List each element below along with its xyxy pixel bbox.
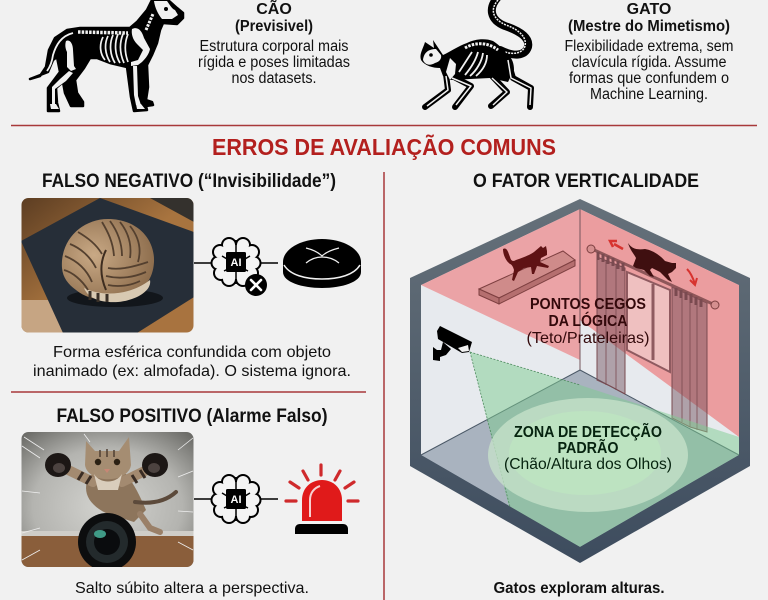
- connector: [194, 262, 278, 264]
- text: cat description: Machine Learning.: [590, 86, 708, 103]
- icon: AI brain with x: AI: [230, 257, 242, 269]
- label: detection zone: ZONA DE DETECÇÃO: [514, 421, 662, 441]
- panel: false positive: [21, 406, 358, 597]
- curtains: [597, 257, 625, 394]
- arrow: left red: [610, 241, 623, 249]
- heading: CÃO: [235, 0, 313, 35]
- icon: dog skeleton: [30, 0, 183, 111]
- label: detection zone: PADRÃO: [558, 437, 618, 457]
- text: cat description: clavícula rígida. Assume: [572, 54, 726, 71]
- heading: GATO: (Mestre do Mimetismo): [568, 18, 730, 35]
- title: ERROS DE AVALIAÇÃO COMUNS: [212, 133, 556, 160]
- heading: CÃO: (Previsivel): [235, 18, 313, 35]
- label: blind spots: [526, 296, 650, 347]
- window: [627, 272, 670, 372]
- label: blind spots: DA LÓGICA: [548, 311, 628, 330]
- heading: false positive: FALSO POSITIVO (Alarme Falso): [56, 406, 328, 427]
- label: blind spots: (Teto/Prateleiras): [526, 330, 650, 347]
- heading: false negative: FALSO NEGATIVO (“Invisibilidade”): [42, 171, 336, 192]
- photo: jumping cat with lens: [21, 432, 194, 571]
- text: cat description: [564, 38, 734, 103]
- shelf: [479, 251, 575, 298]
- icon: AI brain: AI: [230, 494, 242, 506]
- icon: security camera: [433, 326, 472, 361]
- panel: verticality: [410, 171, 750, 597]
- text: dog description: rígida e poses limitadas: [198, 54, 350, 71]
- icon: red alarm beacon: [286, 465, 358, 534]
- icon: cat skeleton: [420, 0, 531, 107]
- panel: cat: [420, 0, 734, 107]
- text: verticality description: Gatos exploram alturas.: [494, 580, 664, 597]
- text: false negative description: inanimado (ex: almofada). O sistema ignora.: [33, 363, 351, 380]
- text: false negative description: [33, 344, 351, 380]
- heading: verticality: O FATOR VERTICALIDADE: [473, 171, 699, 192]
- label: detection zone: [504, 421, 672, 473]
- text: cat description: formas que confundem o: [569, 70, 729, 87]
- panel: false negative: [21, 171, 361, 380]
- heading: GATO: [568, 1, 730, 35]
- icon: cat on curtain rod: [628, 243, 676, 282]
- text: cat description: Flexibilidade extrema, sem: [564, 38, 734, 55]
- text: dog description: [198, 38, 350, 87]
- arrow: right red: [687, 269, 697, 285]
- photo: curled up cat on mat: [21, 198, 194, 333]
- label: detection zone: (Chão/Altura dos Olhos): [504, 456, 672, 473]
- panel: dog: [30, 0, 350, 111]
- heading: CÃO: CÃO: [256, 0, 292, 18]
- heading: GATO: GATO: [627, 1, 671, 18]
- text: false negative description: Forma esférica confundida com objeto: [53, 344, 331, 361]
- text: dog description: nos datasets.: [232, 70, 316, 87]
- connector: [194, 498, 278, 500]
- icon: AI brain with x: [210, 237, 267, 296]
- icon: AI brain: [210, 474, 262, 524]
- icon: cat on shelf: [503, 246, 549, 281]
- text: false positive description: Salto súbito altera a perspectiva.: [75, 580, 309, 597]
- icon: cushion: [283, 239, 361, 288]
- text: dog description: Estrutura corporal mais: [200, 38, 349, 55]
- green detection zone: [470, 352, 739, 547]
- curtain rod: [592, 249, 715, 305]
- label: blind spots: PONTOS CEGOS: [530, 296, 646, 313]
- diagram: room: [410, 199, 750, 563]
